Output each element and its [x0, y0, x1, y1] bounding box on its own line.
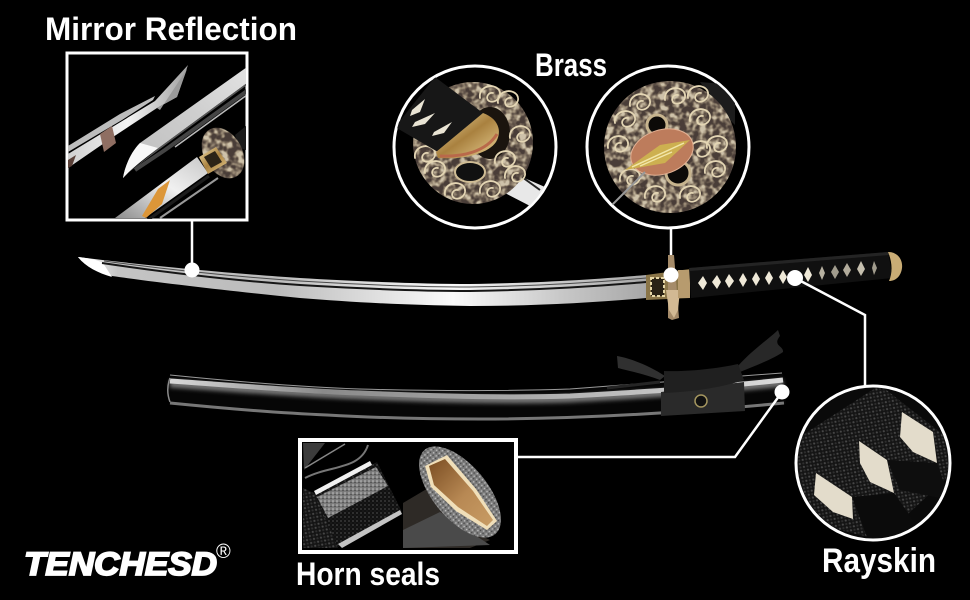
scabbard [167, 330, 786, 420]
scabbard top thin highlight [170, 373, 782, 390]
blade tip [78, 257, 112, 277]
handle diamonds [698, 261, 877, 290]
marker dot: blade [184, 262, 200, 278]
scabbard left end cap [168, 378, 170, 402]
connector: mirror reflection [191, 220, 193, 270]
scabbard wide highlight [170, 380, 783, 397]
handle [689, 252, 893, 298]
panel: brass guard, blade side [587, 66, 749, 228]
scabbard cord [607, 382, 660, 388]
heading: Mirror Reflection: Mirror Reflection [45, 11, 297, 47]
seppa plate [678, 270, 690, 298]
tsuba guard [668, 255, 679, 320]
blade [78, 257, 646, 306]
marker dot: guard [664, 268, 678, 282]
label: Horn seals: Horn seals [296, 556, 440, 592]
sageo knot [664, 364, 744, 393]
blade ridge line [102, 263, 646, 291]
marker dot: handle [787, 270, 803, 286]
habaki pattern [651, 278, 664, 296]
tsuba lower detail [666, 290, 680, 318]
marker dot: scabbard mouth [774, 384, 790, 400]
sageo ribbon left [617, 356, 665, 380]
logo: registered mark: ® [216, 541, 231, 563]
label: Rayskin: Rayskin [822, 542, 936, 580]
handle weave [689, 252, 889, 271]
connector: horn seals [518, 392, 782, 457]
sageo wrap [661, 382, 745, 416]
panel: mirror reflection inset [67, 53, 253, 220]
panel: rayskin inset [795, 385, 950, 545]
sword [78, 252, 902, 320]
kurigata ring [695, 395, 707, 407]
habaki collar [646, 269, 690, 300]
scabbard lower highlight [170, 403, 784, 419]
scabbard soft glow [170, 383, 783, 400]
heading: Brass: Brass [535, 47, 607, 83]
connector: brass [670, 228, 672, 275]
logo: TENCHESD: TENCHESD [24, 546, 217, 582]
sageo ribbon right [738, 330, 783, 372]
blade back line [104, 261, 646, 287]
panel: horn seals inset [300, 433, 516, 552]
connector: rayskin [795, 278, 865, 386]
scabbard body [167, 374, 786, 420]
kashira pommel [888, 252, 902, 281]
panel: brass guard, handle side [394, 66, 556, 228]
